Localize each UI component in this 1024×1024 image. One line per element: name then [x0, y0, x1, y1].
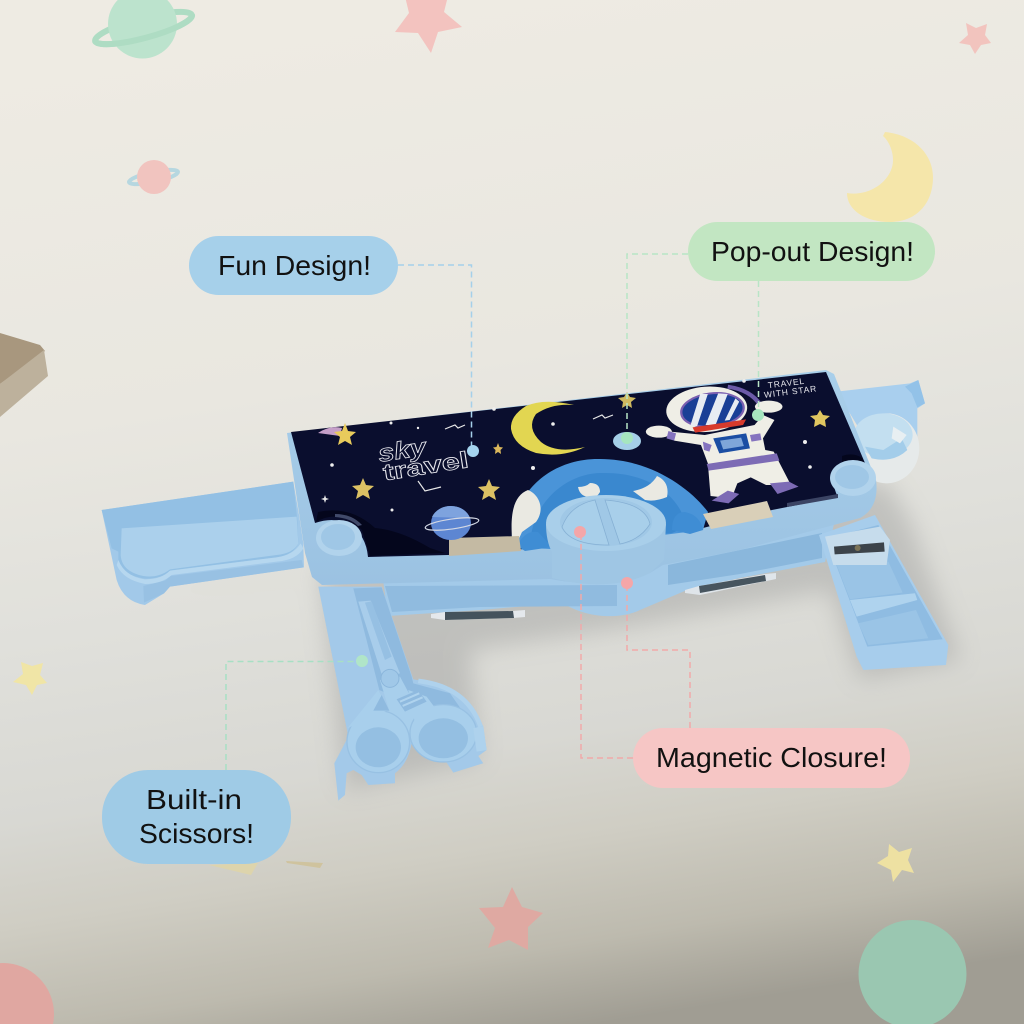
soft shadow under product	[125, 480, 960, 790]
lid lettering: travel with star	[762, 374, 818, 400]
lid art: stars	[318, 392, 830, 503]
decoration: green circle	[858, 920, 966, 1024]
leader: magnetic left	[581, 537, 633, 758]
leader: scissors	[226, 662, 357, 770]
blade	[358, 601, 400, 677]
callout: Magnetic Closure: Magnetic Closure!	[656, 742, 887, 773]
decoration: small pink star top right	[959, 23, 991, 54]
leader: magnetic right	[627, 588, 690, 728]
left pull-out drawer	[102, 482, 304, 605]
lid lettering: sky travel: travel	[381, 446, 470, 485]
callout: Fun Design	[189, 236, 398, 295]
metal clip left	[431, 610, 525, 620]
scissors tray	[318, 587, 487, 801]
groove	[353, 587, 473, 747]
callout: Built-in Scissors: Built-in	[146, 784, 242, 815]
callout: Pop-out Design	[688, 222, 935, 281]
decoration: pink circle	[0, 963, 54, 1024]
lid art: planet	[425, 506, 479, 540]
leader: fun design	[398, 265, 472, 446]
callout: Fun Design: Fun Design!	[218, 250, 371, 281]
callout: Magnetic Closure	[633, 728, 910, 788]
callout: Pop-out Design: Pop-out Design!	[711, 236, 914, 267]
right button	[605, 500, 650, 544]
book at left edge	[0, 333, 48, 417]
case upper shell	[287, 370, 877, 585]
right corner button	[830, 460, 876, 496]
leader: pop-out left	[627, 254, 688, 432]
lid lettering: travel with star: TRAVEL	[767, 376, 805, 390]
pencil box product	[102, 370, 948, 801]
sharpener	[825, 527, 890, 565]
callout dots	[356, 409, 764, 667]
metal clip right	[685, 573, 776, 595]
lid art: small planet	[613, 432, 641, 450]
drawer recess right	[668, 533, 822, 585]
leader: pop-out right	[758, 281, 760, 410]
left button	[562, 500, 609, 545]
decoration: yellow crescent moon	[847, 132, 933, 222]
tape drawer on right	[837, 380, 925, 483]
scissors handles	[347, 669, 487, 773]
lid art: constellations	[418, 415, 613, 491]
decoration: pink star top	[395, 0, 462, 53]
decoration: faint confetti	[209, 861, 323, 875]
callout: Built-in Scissors: Scissors!	[139, 818, 254, 849]
drawer recess left	[385, 585, 617, 612]
decoration: yellow star right	[877, 844, 914, 882]
dark lid	[291, 372, 865, 557]
lid lettering: sky travel: sky	[376, 433, 430, 468]
lid art: tiny dots	[330, 379, 812, 512]
blue dome	[512, 459, 708, 551]
leader lines	[226, 254, 758, 770]
magnet left	[449, 536, 521, 556]
left corner button	[316, 520, 362, 556]
decoration: pink star bottom	[479, 887, 543, 950]
decoration: yellow star left	[13, 662, 47, 695]
lid art: astronaut	[646, 384, 799, 503]
magnetic button housing	[546, 495, 666, 584]
callout: Built-in Scissors	[102, 770, 291, 864]
lower layer of case	[383, 520, 835, 620]
lid lettering: sky travel	[376, 428, 470, 486]
magnet right	[703, 501, 773, 529]
lid lettering: travel with star: WITH STAR	[763, 383, 818, 400]
decoration: green ringed planet	[93, 0, 194, 58]
decoration: pink ringed planet	[128, 160, 179, 194]
lid glossy highlights	[316, 454, 864, 556]
sharpener drawer	[819, 515, 948, 670]
lid art: crescent moon	[511, 402, 585, 455]
